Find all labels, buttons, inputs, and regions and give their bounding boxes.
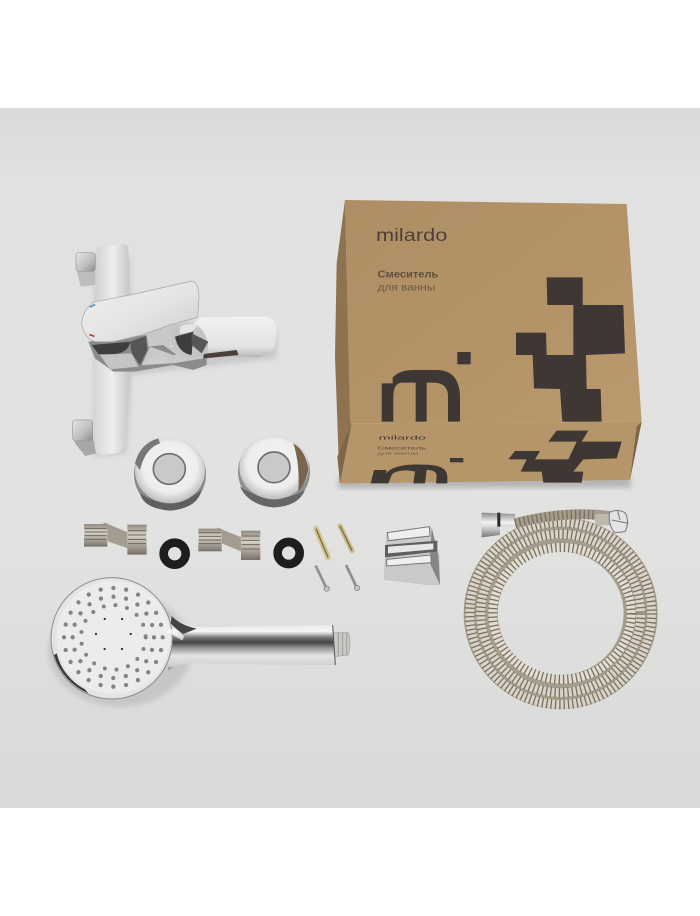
top connector nut xyxy=(76,253,95,287)
flap title: Смеситель xyxy=(377,445,426,451)
flap pixel mark xyxy=(508,431,622,483)
hose connector right xyxy=(595,510,628,533)
box shadow xyxy=(338,477,632,488)
faucet xyxy=(73,244,277,457)
hose coil strands xyxy=(470,522,652,704)
shower holder xyxy=(384,526,440,585)
product subtitle: для ванны xyxy=(378,283,435,294)
cardboard box xyxy=(335,200,642,488)
shower head rim xyxy=(51,578,172,699)
shower shadow xyxy=(48,593,192,707)
hand shower xyxy=(48,578,350,707)
box bottom flap xyxy=(337,422,642,483)
photo backdrop xyxy=(0,108,700,808)
center spray jets xyxy=(96,617,131,651)
eccentric adapter right xyxy=(198,527,260,560)
temperature marks xyxy=(89,304,95,308)
eccentric adapter left xyxy=(84,522,147,555)
handle xyxy=(160,610,335,670)
lever handle xyxy=(82,281,199,342)
screw 2 xyxy=(346,565,360,591)
box bottom flap: для ванны xyxy=(377,452,419,456)
wall flange right xyxy=(238,435,310,507)
mixer body xyxy=(88,335,238,372)
outer nozzle ring xyxy=(64,588,163,687)
wall plug 1 xyxy=(316,529,328,557)
diverter knob xyxy=(172,323,208,358)
bottom connector nut xyxy=(73,420,96,456)
thread tip xyxy=(333,633,350,657)
pixel logo mark xyxy=(516,277,625,422)
spray face xyxy=(57,581,170,694)
m logo xyxy=(382,370,460,422)
flexible hose xyxy=(470,510,652,704)
middle nozzle ring xyxy=(73,597,154,678)
soft faucet shadow xyxy=(93,257,277,457)
rubber washer right xyxy=(278,542,300,564)
rubber washer left xyxy=(164,543,186,565)
spout xyxy=(170,317,277,357)
inner nozzle ring xyxy=(81,605,146,670)
screw 1 xyxy=(316,566,329,591)
hose top section xyxy=(515,514,610,523)
wall plug 2 xyxy=(340,526,352,551)
head highlight xyxy=(168,630,183,638)
hose coil ribs xyxy=(470,522,652,704)
small parts row xyxy=(84,522,300,565)
brand name: milardo xyxy=(376,225,447,245)
dot of m logo xyxy=(457,352,471,364)
wall plugs and screws xyxy=(316,526,360,591)
hose coil base xyxy=(481,535,641,692)
upper wall arm xyxy=(97,244,130,310)
box left side xyxy=(335,200,352,477)
flap brand name: milardo xyxy=(379,435,426,441)
flap m logo xyxy=(371,464,447,483)
product title: Смеситель xyxy=(378,270,438,281)
lower wall arm xyxy=(93,358,131,455)
wall flange left xyxy=(134,438,206,511)
box front face xyxy=(345,200,642,423)
hose connector left xyxy=(482,513,516,537)
